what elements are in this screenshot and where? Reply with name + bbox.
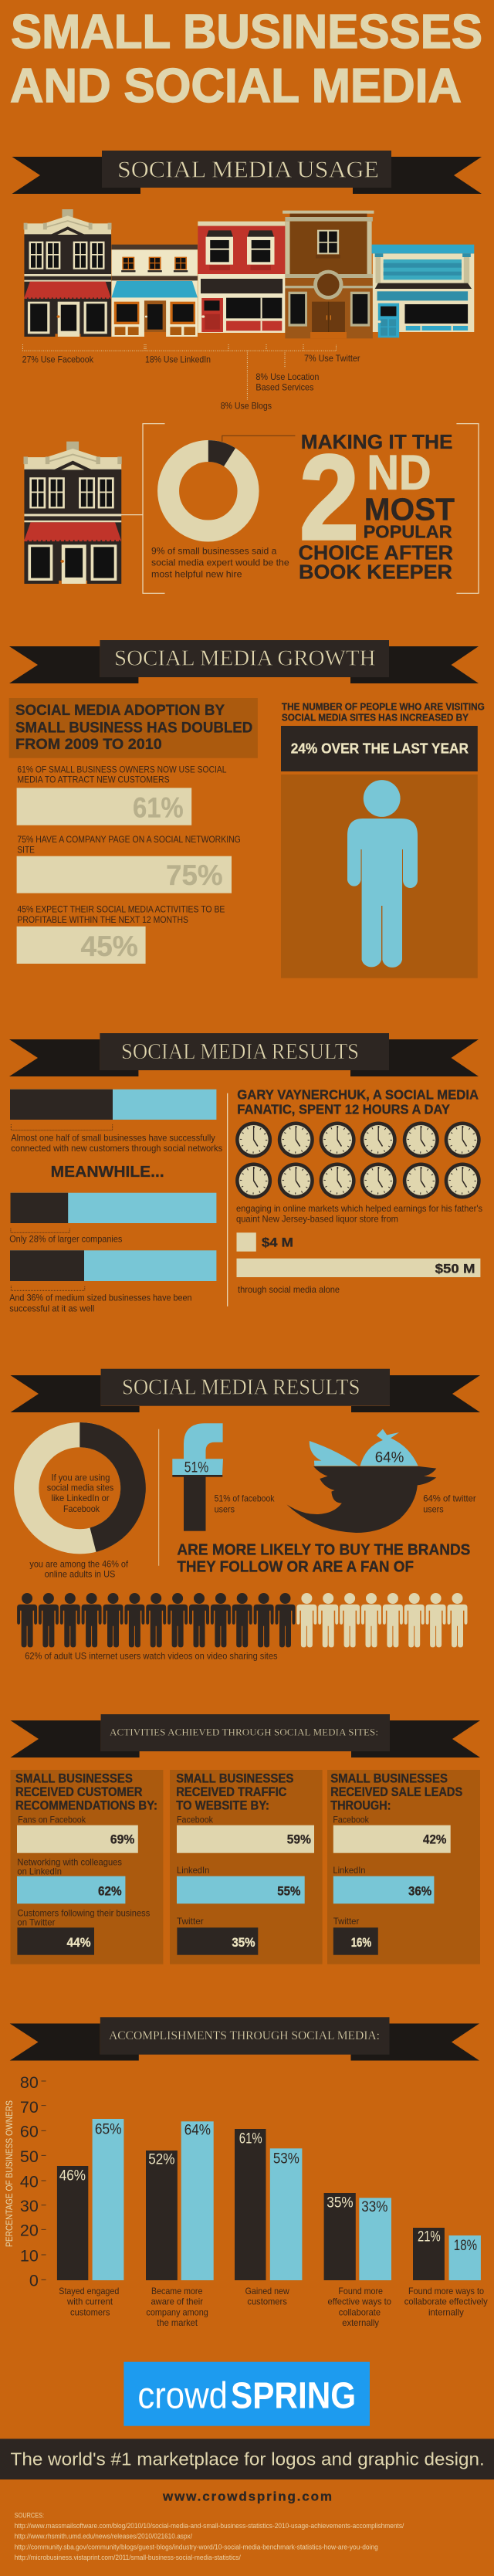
heading: making it the 2nd most popular choice [298,430,455,583]
section ribbon: social media usage [12,151,482,194]
section ribbon: social media results second: SOCIAL MEDIA RESULTS [122,1375,360,1400]
donut chart: 46 percent of online adults: online adults in US [45,1569,115,1580]
panel: traffic to website: Facebook [177,1815,214,1825]
panel: sale leads: SMALL BUSINESSES [330,1772,448,1786]
donut chart: 46 percent of online adults: you are among the 46% of [29,1558,129,1569]
section ribbon: social media usage: SOCIAL MEDIA USAGE [117,155,379,182]
panel: traffic to website: RECEIVED TRAFFIC [176,1785,286,1799]
donut chart: 46 percent of online adults [26,1422,146,1580]
logo: crowdspring: SPRING [231,2375,356,2416]
bar: 36 percent of medium sized businesses: successful at it as well [9,1303,94,1313]
heading: meanwhile: MEANWHILE... [51,1164,164,1181]
sources list: http://www.massmailsoftware.com/blog/2010/10/social-media-and-small-business-statistics-2010-usage-achievements-accomplishments/ [15,2522,404,2530]
bar: 36 percent of medium sized businesses: And 36% of medium sized businesses have been [9,1293,192,1303]
usage percentage labels: 7% Use Twitter [304,353,360,364]
text block: 9 percent caption: 9% of small businesses said a [151,546,277,557]
bar chart: collaborate externally: externally [342,2317,379,2328]
chart axis: percentage of business owners [4,2073,46,2290]
chart axis: percentage of business owners: 0 [29,2272,39,2290]
chart axis: percentage of business owners: 30 [20,2197,39,2215]
bar chart: gained new customers [235,2129,302,2307]
sources list: http://www.rhsmith.umd.edu/news/releases/2010/021610.aspx/ [15,2533,192,2541]
bar: 28 percent of larger companies [9,1193,216,1245]
icon: storefront building with expert hire callout [24,442,122,584]
heading: making it the 2nd most popular choice: POPULAR [364,522,452,542]
panel: traffic to website: Twitter [177,1916,204,1927]
panel: customer recommendations: Networking with colleagues [17,1856,122,1867]
chart axis: percentage of business owners: 80 [20,2073,39,2092]
donut chart: 46 percent of online adults: If you are using [51,1472,110,1483]
panel: adoption doubled heading: FROM 2009 TO 2010 [15,737,162,753]
heading: more likely to buy [177,1541,470,1575]
bar chart: gained new customers: 61% [239,2130,262,2147]
bar chart: gained new customers: 53% [273,2151,299,2168]
section ribbon: social media growth [9,640,479,683]
panel: adoption doubled heading: SOCIAL MEDIA ADOPTION BY [15,703,225,719]
icon: twitter bird 64 percent [286,1429,476,1533]
bar: almost half of small businesses [10,1090,222,1154]
panel: adoption doubled heading [9,698,258,758]
bar chart: collaborate externally [324,2193,391,2328]
clocks: twelve hours [235,1121,481,1198]
stat: 45 percent bar: 45% [80,930,138,962]
panel: customer recommendations: Customers following their business [17,1907,150,1918]
heading: making it the 2nd most popular choice: MAKING IT THE [301,432,452,453]
stat: 45 percent bar: 45% EXPECT THEIR SOCIAL MEDIA ACTIVITIES TO BE [17,903,225,914]
heading: making it the 2nd most popular choice: 2 [299,430,359,565]
panel: customer recommendations: 44% [66,1936,91,1950]
text block: online markets earnings [236,1203,482,1225]
panel: sale leads [327,1770,480,1964]
bar chart: became more aware [146,2121,214,2328]
sources list: SOURCES: [15,2512,44,2520]
panel: traffic to website: LinkedIn [177,1865,209,1876]
sources list: http://microbusiness.vistaprint.com/2011/small-business-social-media-statistics/ [15,2554,241,2562]
text block: visitors increased [281,701,485,771]
section ribbon: social media results: SOCIAL MEDIA RESULTS [121,1039,359,1064]
bar chart: collaborate internally: 21% [418,2229,441,2245]
bar chart: gained new customers: customers [247,2296,287,2307]
donut chart: 46 percent of online adults: social media sites [47,1483,113,1493]
pictogram: 62 percent of adults watch video: 62% of adult US internet users watch videos on video sharing sites [25,1651,278,1662]
donut chart: 46 percent of online adults: like LinkedIn or [51,1493,110,1503]
panel: traffic to website: TO WEBSITE BY: [176,1798,269,1812]
section ribbon: activities achieved [11,1714,480,1757]
donut chart: 9 percent [168,436,295,531]
bar chart: became more aware: aware of their [151,2296,203,2307]
stat: 45 percent bar [17,903,225,964]
bar chart: collaborate internally [404,2228,488,2317]
heading: gary vaynerchuk [237,1086,479,1117]
bar chart: became more aware: 52% [148,2151,175,2168]
bar chart: became more aware: 64% [184,2123,211,2139]
usage percentage labels: 27% Use Facebook [22,354,94,364]
panel: customer recommendations: RECOMMENDATIONS BY: [15,1798,157,1812]
icon: twitter bird 64 percent: users [423,1503,444,1514]
panel: traffic to website [170,1770,323,1964]
icon: facebook f 51 percent: 51% [184,1460,208,1476]
bar: 28 percent of larger companies: Only 28% of larger companies [9,1234,122,1245]
bar: almost half of small businesses: connected with new customers through social networks [11,1143,222,1154]
stat: 75 percent bar: 75% HAVE A COMPANY PAGE ON A SOCIAL NETWORKING [17,834,241,845]
bar chart: collaborate externally: collaborate [339,2307,381,2317]
chart axis: percentage of business owners: PERCENTAGE OF BUSINESS OWNERS [4,2100,15,2247]
bar chart: 4 million to 50 million: $50 M [435,1262,475,1276]
panel: traffic to website: 55% [277,1885,301,1899]
heading: more likely to buy: THEY FOLLOW OR ARE A FAN OF [177,1558,414,1575]
panel: sale leads: Facebook [333,1815,370,1825]
tagline band [0,2439,494,2479]
bar chart: collaborate externally: effective ways to [327,2296,391,2307]
usage percentage labels: 8% Use Location [255,371,319,382]
stat: 75 percent bar [17,834,241,893]
stat: 61 percent bar: MEDIA TO ATTRACT NEW CUSTOMERS [17,774,170,785]
bar chart: collaborate externally: 33% [361,2199,387,2215]
heading: making it the 2nd most popular choice: CHOICE AFTER [298,541,453,564]
heading: making it the 2nd most popular choice: ND [367,446,431,500]
bar chart: gained new customers: Gained new [245,2286,289,2296]
panel: customer recommendations [11,1770,163,1964]
bar chart: stayed engaged: with current [66,2296,113,2307]
panel: traffic to website: 59% [287,1833,311,1847]
panel: sale leads: THROUGH: [330,1798,391,1812]
stat: 61 percent bar: 61% OF SMALL BUSINESS OWNERS NOW USE SOCIAL [17,764,227,774]
stat: 45 percent bar: PROFITABLE WITHIN THE NEXT 12 MONTHS [17,914,188,925]
bar chart: stayed engaged: Stayed engaged [59,2286,119,2296]
website url: www.crowdspring.com [162,2489,332,2503]
pictogram: 62 percent of adults watch video [17,1593,468,1662]
usage percentage labels: 18% Use LinkedIn [145,354,211,364]
text block: 9 percent caption [151,546,289,580]
panel: sale leads: 42% [423,1833,447,1847]
section ribbon: social media results [9,1033,479,1076]
icon: facebook f 51 percent: users [215,1503,235,1514]
panel: customer recommendations: RECEIVED CUSTOMER [15,1785,143,1799]
usage percentage labels [22,353,360,412]
callout bracket frame [121,424,479,593]
usage percentage labels: 8% Use Blogs [221,401,272,412]
donut chart: 46 percent of online adults: Facebook [63,1503,100,1514]
usage percentage labels: Based Services [255,382,313,393]
chart axis: percentage of business owners: 70 [20,2098,39,2117]
bar: almost half of small businesses: Almost one half of small businesses have successfully [11,1132,215,1143]
panel: customer recommendations: 69% [110,1833,135,1847]
title: AND SOCIAL MEDIA [10,59,462,113]
stat: 75 percent bar: 75% [166,859,223,891]
bar chart: 4 million to 50 million: $4 M [262,1235,293,1249]
bar chart: collaborate externally: Found more [338,2286,383,2296]
chart axis: percentage of business owners: 60 [20,2123,39,2141]
bar chart: became more aware: Became more [151,2286,203,2296]
bar chart: 4 million to 50 million [236,1232,480,1295]
bar chart: collaborate internally: internally [428,2307,464,2317]
text block: 9 percent caption: most helpful new hire [151,569,242,580]
chart axis: percentage of business owners: 10 [20,2246,39,2265]
icon: twitter bird 64 percent: 64% [375,1449,404,1466]
tagline band: The world's #1 marketplace for logos and graphic design. [11,2449,485,2469]
icon: facebook f 51 percent: 51% of facebook [215,1493,275,1503]
heading: more likely to buy: ARE MORE LIKELY TO BUY THE BRANDS [177,1541,470,1558]
bar chart: 4 million to 50 million: through social media alone [238,1284,340,1295]
stat: 61 percent bar [17,764,227,825]
section ribbon: social media growth: SOCIAL MEDIA GROWTH [114,646,376,671]
logo: crowdspring [124,2362,370,2426]
text block: 9 percent caption: social media expert would be the [151,558,289,568]
panel: sale leads: RECEIVED SALE LEADS [330,1785,462,1799]
stat: 61 percent bar: 61% [133,792,184,824]
bar chart: collaborate internally: collaborate effectively [404,2296,488,2307]
panel: sale leads: LinkedIn [333,1865,366,1876]
bar chart: became more aware: company among [146,2307,208,2317]
section ribbon: social media results second [11,1369,480,1412]
section ribbon: accomplishments: ACCOMPLISHMENTS THROUGH SOCIAL MEDIA: [109,2029,380,2042]
bar chart: collaborate internally: Found more ways to [408,2286,484,2296]
bar: 36 percent of medium sized businesses [9,1250,216,1313]
panel: adoption doubled heading: SMALL BUSINESS HAS DOUBLED [15,720,252,736]
heading: gary vaynerchuk: GARY VAYNERCHUK, A SOCIAL MEDIA [237,1086,479,1102]
heading: making it the 2nd most popular choice: BOOK KEEPER [299,560,452,583]
heading: gary vaynerchuk: FANATIC, SPENT 12 HOURS A DAY [237,1102,450,1117]
panel: sale leads: 36% [408,1885,431,1899]
sources list: http://community.sba.gov/community/blogs/guest-blogs/industry-word/10-social-media-benchmark-statistics-how-are-you-doing [15,2543,378,2551]
icon: facebook f 51 percent [172,1423,275,1531]
panel: customer recommendations: on LinkedIn [17,1866,62,1876]
panel: customer recommendations: SMALL BUSINESSES [15,1772,133,1786]
panel: blue person figure [281,774,478,978]
panel: customer recommendations: on Twitter [17,1917,55,1928]
text block: visitors increased: SOCIAL MEDIA SITES HAS INCREASED BY [282,712,469,724]
title [10,5,482,113]
sources list [15,2512,404,2562]
chart axis: percentage of business owners: 50 [20,2147,39,2166]
bar chart: stayed engaged: 46% [59,2168,86,2184]
bar chart: collaborate externally: 35% [327,2195,354,2211]
text block: visitors increased: 24% OVER THE LAST YEAR [291,741,469,757]
chart axis: percentage of business owners: 40 [20,2172,39,2191]
chart axis: percentage of business owners: 20 [20,2222,39,2240]
title: SMALL BUSINESSES [11,5,482,59]
panel: traffic to website: SMALL BUSINESSES [176,1772,293,1786]
dotted leader lines under the buildings [22,344,337,400]
panel: customer recommendations: 62% [98,1885,122,1899]
bar chart: became more aware: the market [157,2317,198,2328]
heading: making it the 2nd most popular choice: MOST [364,491,455,527]
section ribbon: accomplishments [10,2017,479,2060]
panel: sale leads: Twitter [333,1916,359,1927]
stat: 75 percent bar: SITE [17,845,35,856]
illustration: row of storefront buildings [24,209,474,338]
section ribbon: activities achieved: ACTIVITIES ACHIEVED THROUGH SOCIAL MEDIA SITES: [110,1726,378,1737]
icon: twitter bird 64 percent: 64% of twitter [423,1493,476,1503]
panel: customer recommendations: Fans on Facebook [18,1815,86,1825]
bar chart: stayed engaged [57,2119,124,2317]
bar chart: collaborate internally: 18% [454,2238,477,2254]
panel: traffic to website: 35% [232,1936,255,1950]
bar chart: stayed engaged: customers [70,2307,110,2317]
logo: crowdspring: crowd [137,2375,228,2416]
panel: sale leads: 16% [351,1936,371,1950]
text block: online markets earnings: quaint New Jersey-based liquor store from [236,1214,398,1225]
bar chart: stayed engaged: 65% [95,2121,122,2137]
